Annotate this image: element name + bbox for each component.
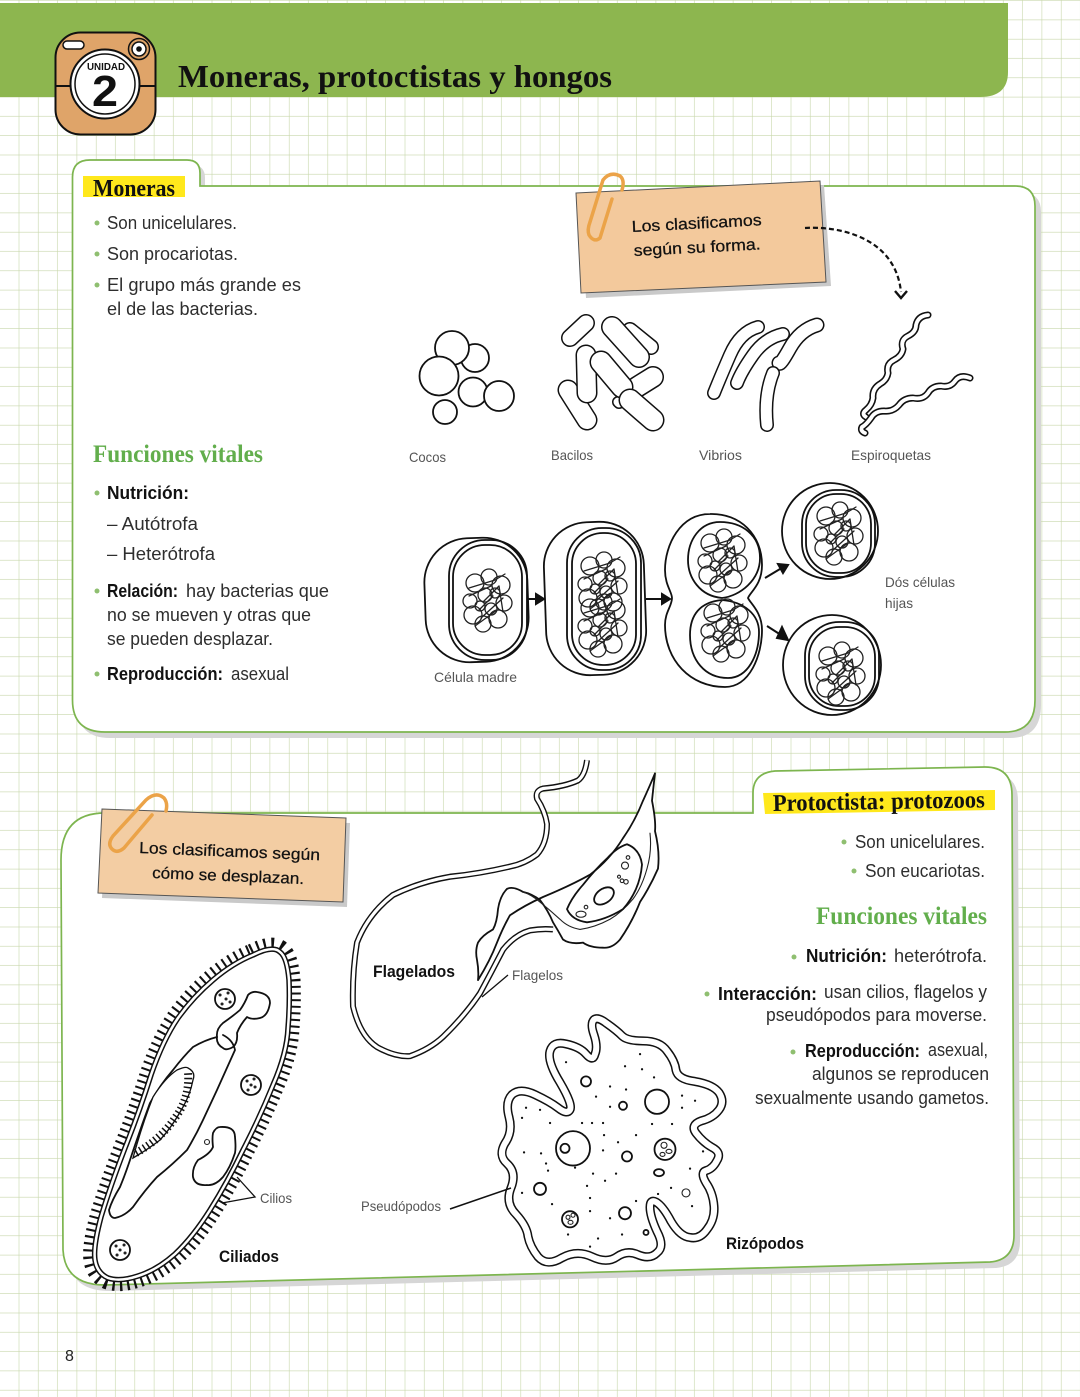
text block: funciones vitales protozoos: asexual, [928,1040,988,1060]
label: célula madre: Célula madre [434,669,517,685]
callout: desplazan note: Los clasificamos según [139,840,320,864]
illustration: rizópodo [502,1019,722,1262]
callout: desplazan note [98,795,350,907]
text block: protozoos traits: Son unicelulares. [855,832,985,852]
text block: funciones vitales list: no se mueven y otras que [107,605,311,625]
text block: moneras traits: Son unicelulares. [107,213,237,233]
arrow [646,594,670,604]
text block: funciones vitales protozoos: Reproducción: [805,1041,920,1061]
text block: funciones vitales list: – Autótrofa [107,514,199,534]
arrow: up [765,564,788,578]
panel: moneras [72,160,1041,738]
text block: protozoos traits [842,832,985,881]
text block: funciones vitales list: – Heterótrofa [107,544,216,564]
chart: bacilos [568,323,653,420]
text block: moneras traits: El grupo más grande es [107,275,301,295]
cell: dividing [665,514,762,687]
text block: funciones vitales list [94,483,329,684]
chart: vibrios [714,325,817,425]
chart: cell division [423,483,955,715]
text block: funciones vitales protozoos: Nutrición: [806,946,887,966]
label: cocos: Cocos [409,449,446,465]
chart: espiroquetas [861,315,970,433]
text block: moneras traits: Son procariotas. [107,244,238,264]
text block: funciones vitales list: Relación: [107,581,178,601]
text block: moneras traits: el de las bacterias. [107,299,258,319]
label: pseudópodos: Pseudópodos [361,1198,441,1214]
heading: funciones vitales: Funciones vitales [93,441,263,468]
arrow [528,594,544,604]
heading: funciones vitales: Funciones vitales [816,903,987,930]
text block: funciones vitales protozoos: heterótrofa. [894,946,987,966]
label: dos células hijas [885,574,955,611]
label: espiroquetas: Espiroquetas [851,447,931,463]
label: dos células hijas: Dós células [885,574,955,590]
icon: unit camera badge [56,32,156,134]
text block: funciones vitales list: se pueden desplazar. [107,629,273,649]
icon: unit camera badge: UNIDAD [87,62,125,73]
callout: forma note [576,174,831,298]
header band [0,3,1008,97]
label: vibrios: Vibrios [699,447,742,463]
label: flagelados: Flagelados [373,962,455,981]
label: cilios: Cilios [260,1190,292,1206]
text block: funciones vitales list: hay bacterias que [186,581,329,601]
icon: unit camera badge: 2 [92,67,118,116]
heading: Moneras: Moneras [93,176,175,202]
text block: funciones vitales protozoos: Interacción: [718,984,817,1004]
callout: desplazan note: cómo se desplazan. [152,865,304,888]
label: dos células hijas: hijas [885,595,913,611]
label: ciliados: Ciliados [219,1247,279,1266]
text block: moneras traits [94,213,301,319]
panel: protozoos [61,760,1020,1291]
label: cilios [222,1177,292,1206]
arrow: down [767,626,788,640]
label: pseudópodos [361,1188,511,1214]
text block: funciones vitales protozoos: pseudópodos para moverse. [766,1005,987,1025]
cell: elongating [542,520,648,677]
text block: funciones vitales list: asexual [231,664,289,684]
title: Moneras, protoctistas y hongos [178,58,612,94]
heading: Protoctista: Protoctista: protozoos [773,787,985,817]
page number: 8 [65,1348,74,1365]
cell: daughter bottom [783,615,881,715]
text block: funciones vitales list: Nutrición: [107,483,189,503]
chart: cocos [420,331,514,424]
label: rizópodos: Rizópodos [726,1234,804,1253]
label: bacilos: Bacilos [551,447,593,463]
illustration: flagelado [353,760,659,1056]
cell: daughter top [782,483,878,579]
callout: forma note: según su forma. [633,236,761,260]
text block: protozoos traits: Son eucariotas. [865,861,985,881]
text block: funciones vitales protozoos: usan cilios, flagelos y [824,982,987,1002]
text block: funciones vitales protozoos: algunos se reproducen [812,1064,989,1084]
callout: forma note: Los clasificamos [631,212,762,236]
illustration: ciliado [95,949,289,1280]
text block: funciones vitales protozoos: sexualmente usando gametos. [755,1088,989,1108]
cell: madre [423,536,530,664]
text block: funciones vitales protozoos [704,946,989,1108]
label: flagelos [482,967,563,997]
arrow: dashed to espiroquetas [805,228,907,298]
label: flagelos: Flagelos [512,967,563,983]
text block: funciones vitales list: Reproducción: [107,664,223,684]
